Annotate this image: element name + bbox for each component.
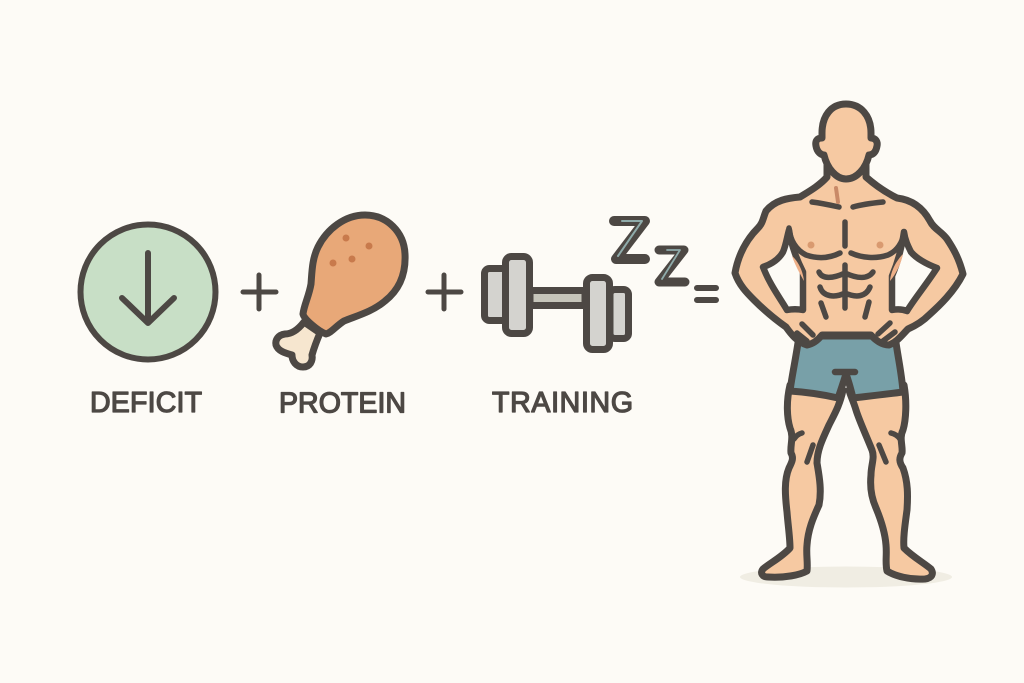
plus sign 2	[428, 275, 461, 309]
abs	[819, 265, 873, 317]
label: deficit: DEFICIT	[90, 387, 202, 419]
plus sign 1	[243, 275, 276, 309]
icon: deficit circle with down arrow	[80, 224, 216, 360]
ground shadow	[740, 566, 952, 588]
right arm gap	[892, 232, 937, 311]
torso details	[789, 202, 904, 462]
meat	[303, 215, 405, 334]
left main plate	[506, 256, 530, 334]
equals sign	[697, 288, 716, 300]
small Z	[659, 250, 685, 282]
nipples	[808, 242, 884, 248]
label: protein: PROTEIN	[279, 388, 406, 420]
right leg	[849, 385, 932, 579]
right main plate	[586, 278, 610, 350]
knees	[794, 433, 900, 462]
bone	[276, 322, 320, 367]
upper body silhouette	[735, 160, 963, 345]
meat spots	[330, 234, 372, 266]
head	[816, 104, 877, 179]
bar	[530, 290, 585, 306]
legs	[762, 385, 932, 579]
collarbones	[812, 202, 883, 207]
chest lines	[789, 222, 904, 257]
large Z	[614, 221, 645, 259]
left outer plate	[484, 268, 508, 320]
shorts crotch tab	[835, 369, 855, 375]
label: training: TRAINING	[492, 387, 633, 419]
right outer plate	[610, 290, 628, 338]
icon: dumbbell	[484, 256, 628, 350]
icon: sleep Z letters	[614, 221, 685, 282]
left leg	[762, 385, 843, 577]
figure: muscular man	[735, 104, 963, 579]
icon: chicken drumstick	[276, 215, 405, 367]
left arm gap	[763, 230, 803, 310]
lat shading	[792, 254, 903, 281]
fingers	[797, 323, 895, 341]
scar mark	[836, 188, 838, 202]
shorts	[790, 336, 903, 398]
